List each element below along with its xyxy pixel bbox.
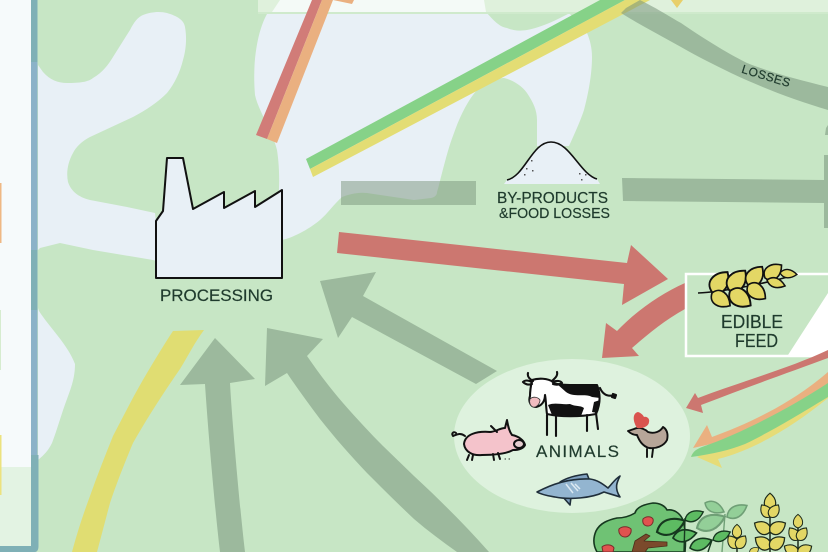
arrow: edible feed to animals, red	[602, 283, 685, 358]
water: central lake	[254, 14, 592, 240]
icon: wheat plants	[724, 493, 814, 552]
arrow: processing to top, red and orange stripe	[256, 0, 354, 143]
arrow: losses curve	[621, 0, 828, 110]
green land blob below top band	[486, 12, 572, 31]
label: by-products and food losses	[497, 190, 610, 222]
icon: pig	[452, 420, 525, 460]
left panel	[0, 0, 38, 552]
arrow: grazing to processing, grey	[180, 338, 255, 552]
panel: edible feed	[686, 259, 828, 356]
icon: wheat	[698, 259, 797, 312]
arrow: animals to processing, grey	[320, 272, 497, 384]
label: processing: PROCESSING	[160, 286, 273, 305]
arrow: processing to by-products, grey	[341, 181, 476, 205]
arrow: crops to processing, grey	[265, 328, 489, 552]
top panel band	[258, 0, 828, 14]
icon: apple tree	[594, 503, 686, 552]
icon: crops	[594, 493, 814, 552]
water: lower left river	[38, 308, 75, 460]
icon: chicken	[628, 412, 668, 457]
label: losses: LOSSES	[740, 62, 792, 90]
icon: by-products pile	[504, 142, 600, 184]
arrow: green and yellow stripe to top	[306, 0, 683, 177]
arrow: by-products to right, grey	[622, 125, 828, 228]
label: edible feed: EDIBLE	[721, 312, 783, 332]
icon: cow	[523, 372, 616, 436]
label: by-products and food losses: &FOOD LOSSES	[499, 205, 610, 222]
icon: factory	[156, 158, 282, 278]
label: edible feed	[721, 312, 783, 351]
water: upper left river	[38, 12, 186, 262]
arrow: processing to edible feed, red	[337, 232, 668, 305]
icon: fish	[537, 474, 620, 505]
icon: leafy plants	[654, 507, 732, 552]
arrow: yellow curve to processing	[72, 330, 204, 552]
label: by-products and food losses: BY-PRODUCTS	[497, 190, 608, 207]
label: edible feed: FEED	[735, 331, 778, 351]
label: animals: ANIMALS	[536, 442, 619, 461]
icon: faded plant	[694, 498, 750, 552]
arrow: orange, green and yellow to animals	[691, 372, 828, 468]
panel: animals	[452, 359, 690, 513]
arrow: thin red to animals	[686, 350, 828, 413]
